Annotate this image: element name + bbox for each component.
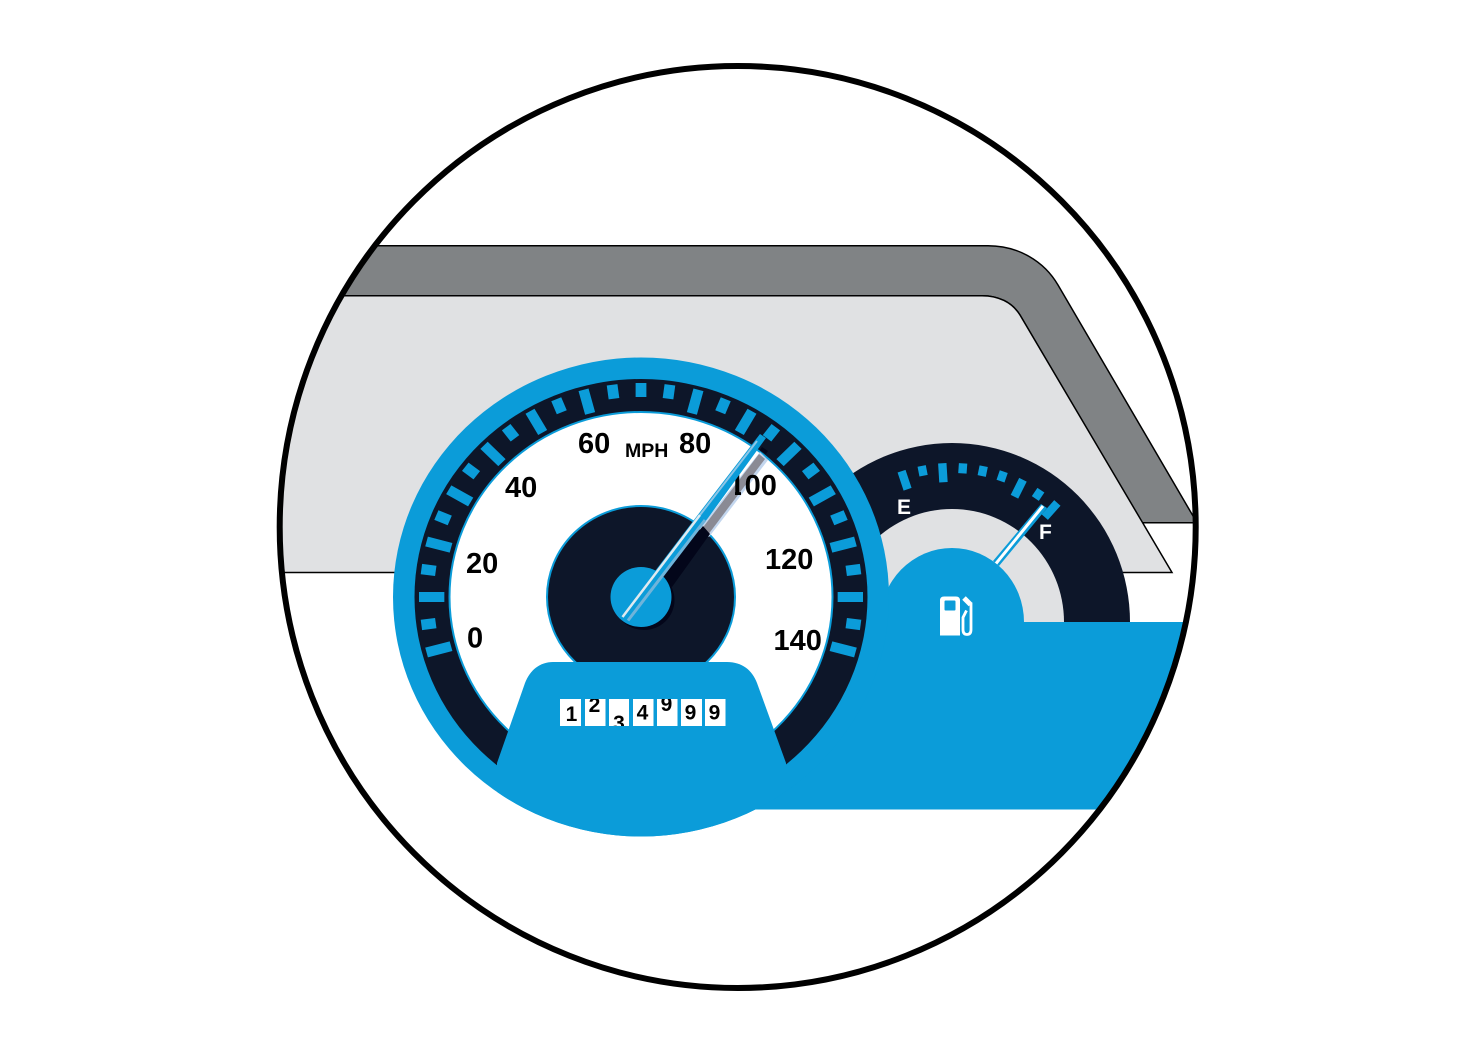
speed scale labels: 20 (466, 548, 498, 580)
fuel label F: F (1039, 521, 1052, 544)
odometer digits: 9 (685, 702, 696, 724)
fuel gauge hub (880, 548, 1024, 622)
speedometer white face (450, 412, 832, 782)
needle shadow (614, 447, 768, 630)
speed scale labels: 0 (467, 622, 483, 654)
dashboard panel (260, 246, 1220, 809)
speed scale labels: 140 (774, 625, 822, 657)
infographic: car dashboard (276, 63, 1199, 991)
speedometer ticks (419, 383, 863, 657)
MPH label: MPH (625, 440, 668, 462)
speed scale labels (466, 428, 822, 657)
center hub (547, 506, 735, 688)
odometer digits: 9 (661, 693, 672, 716)
odometer housing (497, 662, 786, 840)
speed scale labels: 100 (728, 470, 777, 502)
dashboard hood: gray band (346, 245, 1193, 524)
odometer (560, 699, 726, 726)
odometer digits (566, 699, 720, 726)
dashboard face: light gray (260, 296, 1172, 572)
odometer digits: 3 (613, 712, 625, 735)
blue console base (756, 622, 1183, 810)
odometer digits: 9 (709, 702, 720, 724)
fuel label E: E (897, 496, 911, 519)
odometer digits: 4 (637, 702, 649, 724)
fuel gauge ticks (898, 463, 1061, 520)
odometer digits: 2 (589, 694, 600, 717)
speed scale labels: 120 (765, 544, 813, 576)
icon: fuel pump (940, 596, 971, 636)
speed needle (620, 434, 766, 622)
fuel needle (993, 504, 1047, 566)
speed scale labels: 80 (679, 428, 711, 460)
outer circle frame (280, 66, 1196, 988)
hub cap (610, 567, 672, 627)
speedometer (393, 358, 889, 840)
speedometer blue bezel (393, 358, 889, 836)
speed scale labels: 40 (505, 472, 537, 504)
speedometer navy ring (414, 379, 868, 815)
odometer digits: 1 (566, 703, 578, 726)
fuel gauge dial (853, 443, 1130, 622)
speed scale labels: 60 (578, 428, 610, 460)
fuel gauge (853, 443, 1130, 622)
odometer cells (560, 699, 726, 726)
